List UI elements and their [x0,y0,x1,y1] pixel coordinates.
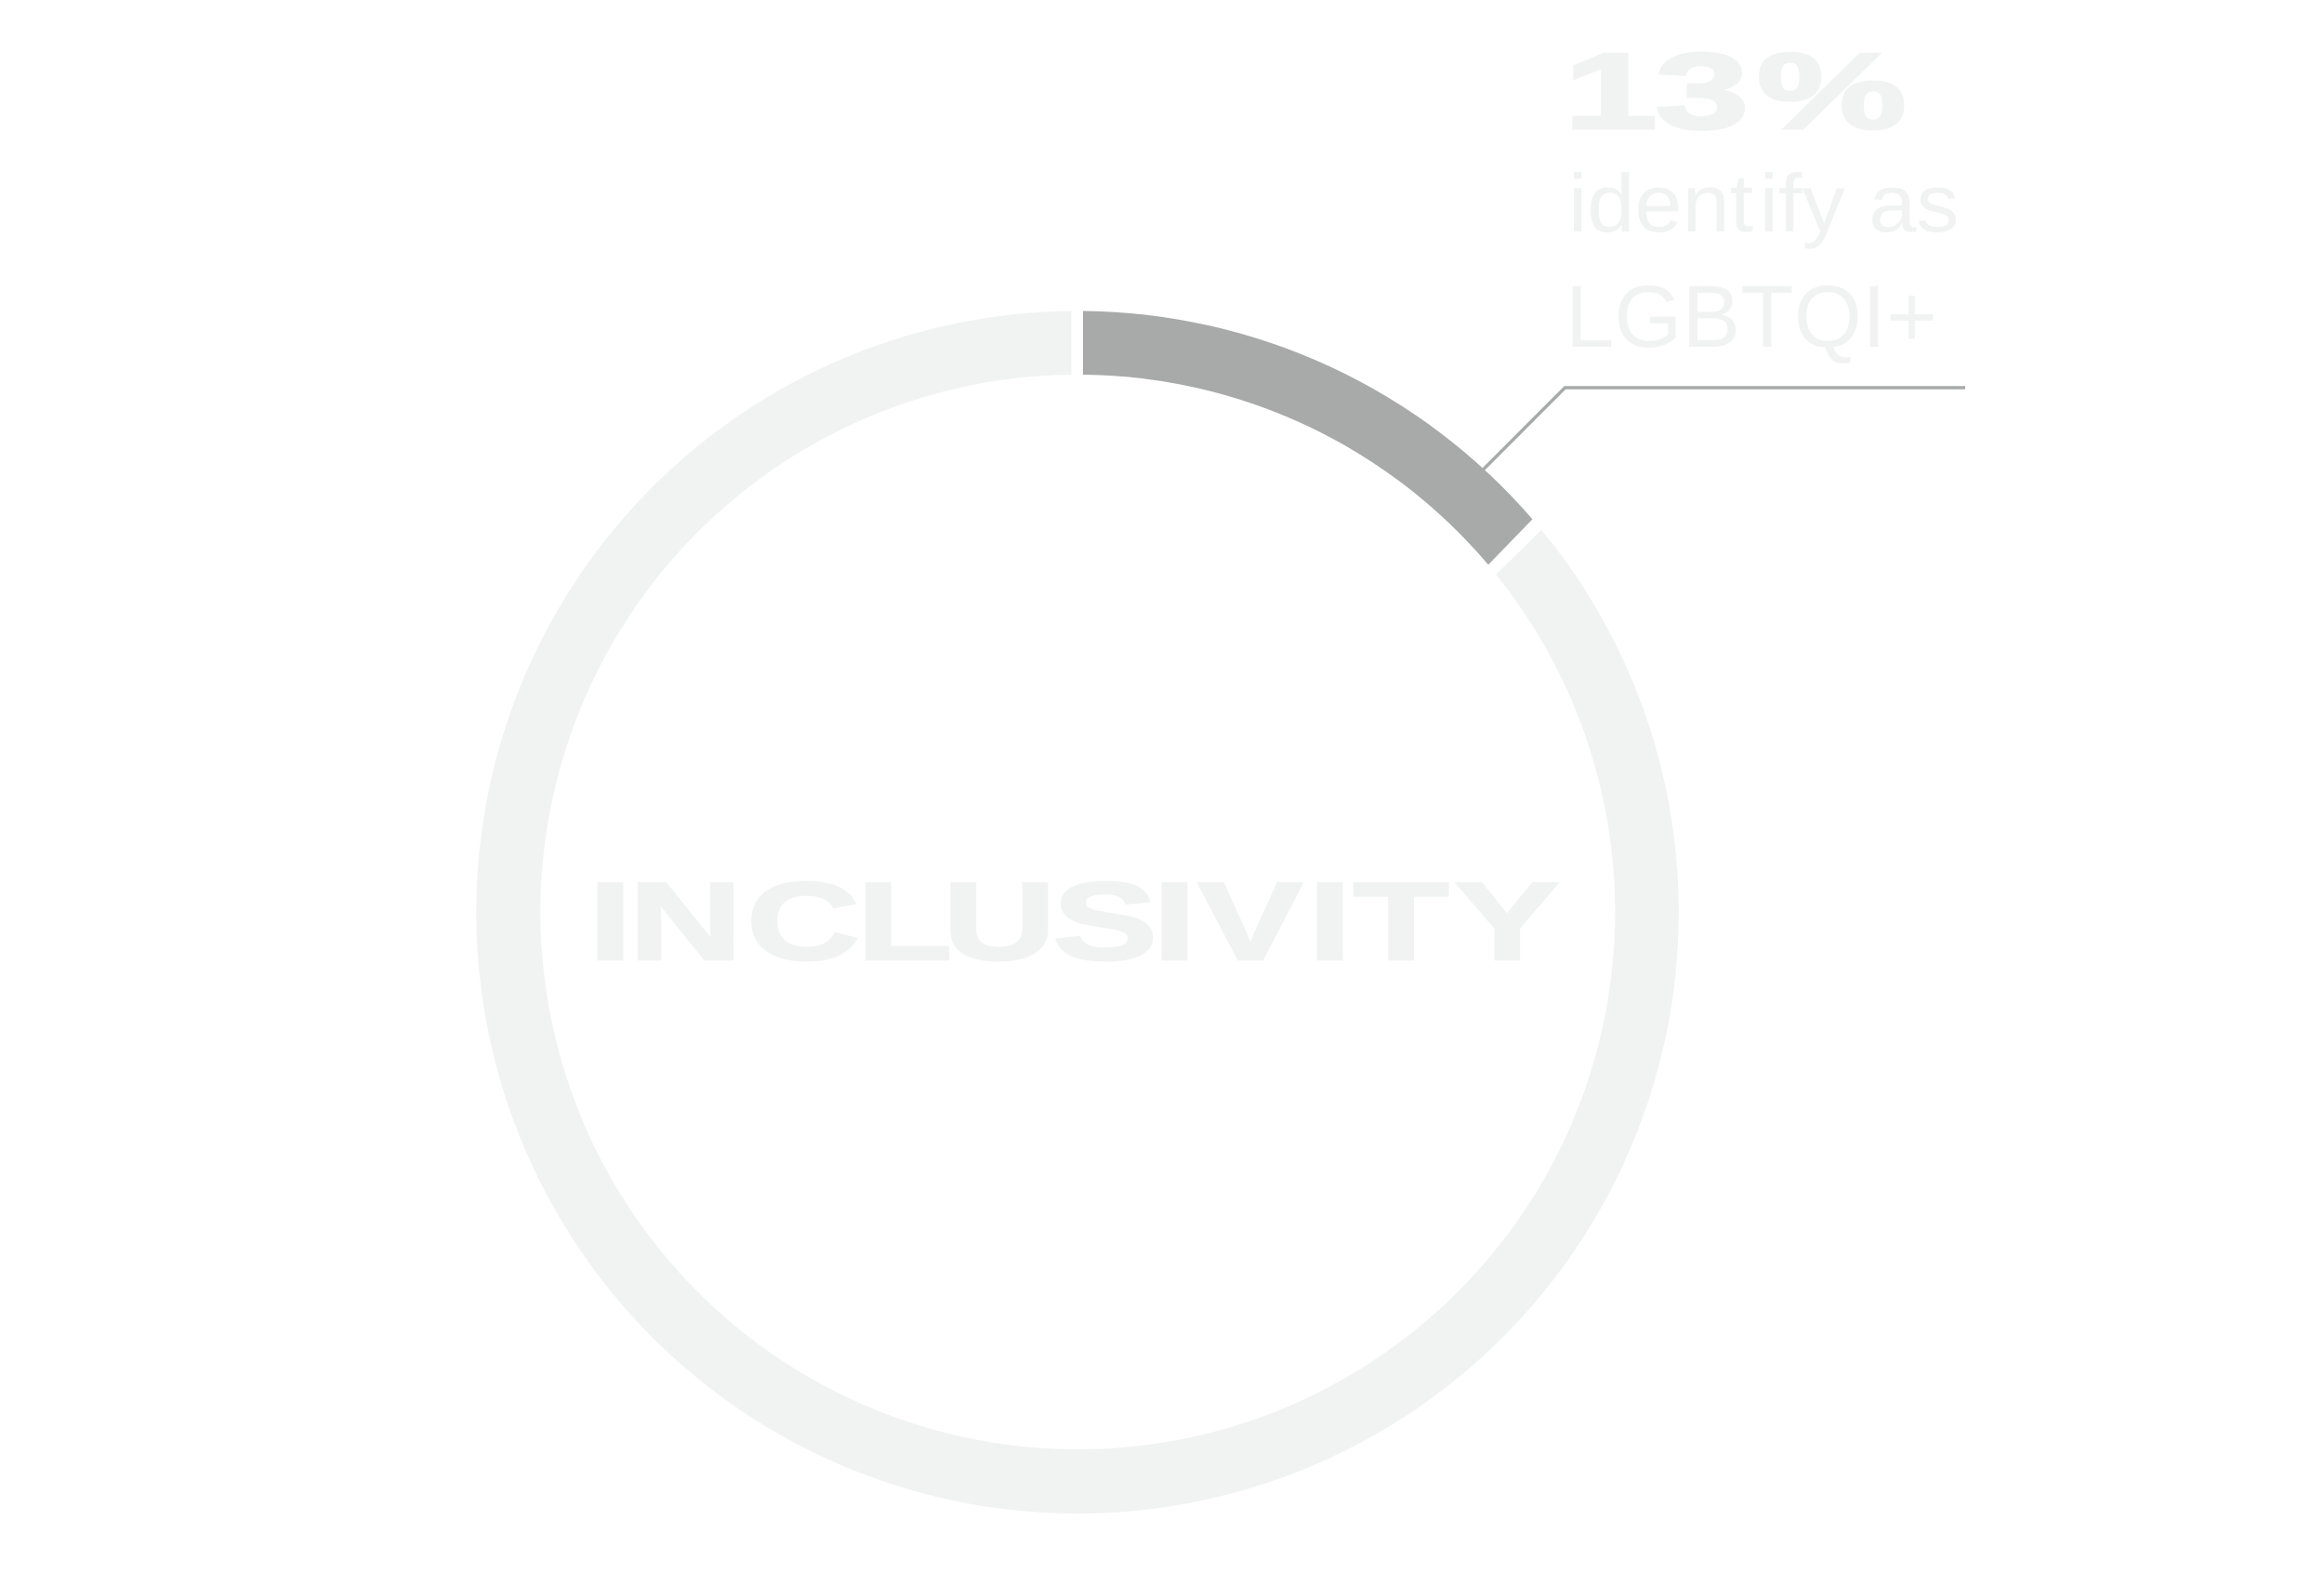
leader line from segment to callout [1484,388,1965,469]
ring segment: 13 percent highlighted [1083,311,1532,565]
center label: INCLUSIVITY [588,860,1560,983]
callout text line 2: LGBTQI+ [1565,268,1937,366]
callout number: 13% [1564,31,1907,152]
ring segment: remaining share [476,311,1679,1514]
callout [1564,31,1959,366]
callout text line 1: identify as [1568,159,1959,250]
donut chart: 13% LGBTQI+ share [476,311,1679,1514]
